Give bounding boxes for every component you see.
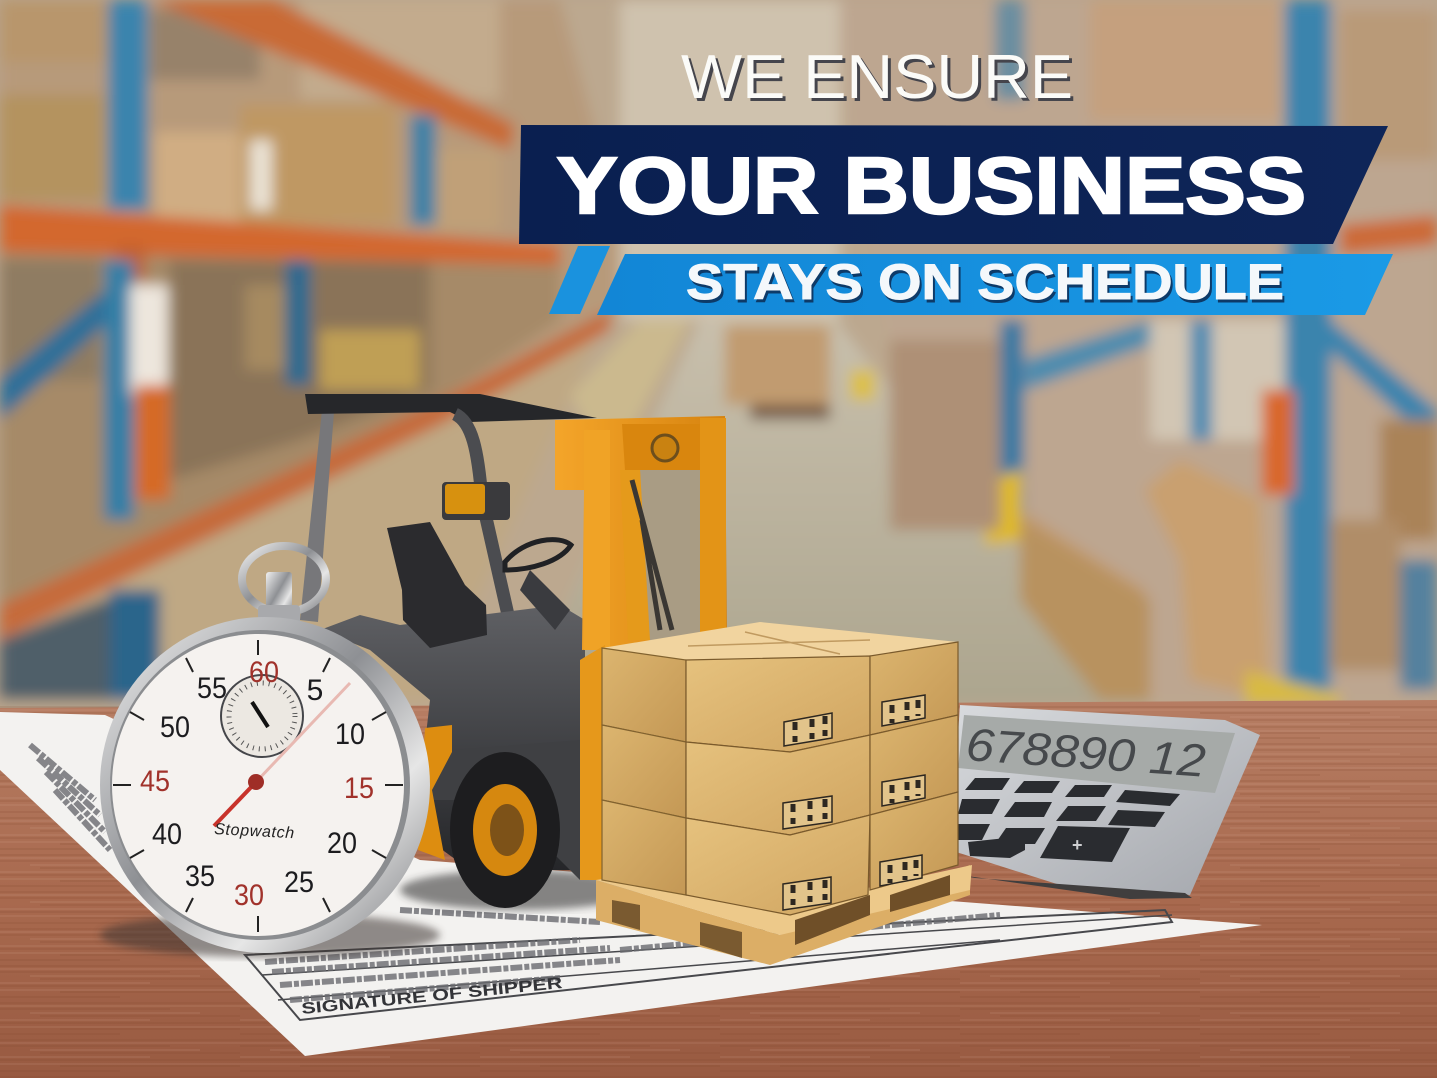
banner: your business: YOUR BUSINESS xyxy=(557,141,1306,230)
forklift seat xyxy=(387,522,487,648)
stopwatch shadow xyxy=(100,913,440,957)
forklift xyxy=(300,394,727,910)
dial numbers: 5 xyxy=(307,674,323,707)
dial numbers: 50 xyxy=(160,711,190,744)
stopwatch brand: Stopwatch xyxy=(214,821,295,842)
dial numbers: 10 xyxy=(335,718,365,751)
dial numbers: 25 xyxy=(284,866,314,899)
document caption: SIGNATURE OF SHIPPER xyxy=(301,975,564,1018)
sub dial xyxy=(221,675,303,757)
pallet boxes xyxy=(596,622,972,965)
dial numbers: 35 xyxy=(185,860,215,893)
left shelf boxes xyxy=(0,0,108,62)
forklift overhead guard xyxy=(300,394,597,690)
left orange beams xyxy=(0,205,560,265)
dial ticks xyxy=(113,640,403,932)
far aisle box xyxy=(725,325,830,405)
dial numbers: 45 xyxy=(140,765,170,798)
headline: WE ENSURE xyxy=(681,43,1073,112)
left box column xyxy=(602,648,686,895)
stopwatch xyxy=(100,546,440,957)
dial numbers: 60 xyxy=(249,656,279,689)
dial numbers xyxy=(140,656,374,912)
shipping document xyxy=(0,712,1262,1056)
headline xyxy=(519,43,1393,315)
wooden pallet xyxy=(596,865,972,965)
right box column xyxy=(870,642,958,890)
banner: stays on schedule: STAYS ON SCHEDULE xyxy=(686,254,1284,310)
dial numbers: 55 xyxy=(197,672,227,705)
aisle floor xyxy=(520,320,1150,705)
forklift wheel xyxy=(450,752,560,908)
dial numbers: 30 xyxy=(234,879,264,912)
wooden table xyxy=(0,700,1437,1078)
left lower dim area xyxy=(0,250,560,605)
dial numbers: 15 xyxy=(344,772,374,805)
right shelving xyxy=(1150,320,1285,440)
forklift body xyxy=(320,605,585,870)
banner: stays on schedule xyxy=(549,246,1393,315)
right boxes xyxy=(1145,460,1270,700)
calculator: 678890 12 xyxy=(964,718,1207,787)
forklift mast xyxy=(555,416,727,880)
box handling labels xyxy=(783,695,925,910)
stopwatch hands xyxy=(214,782,256,826)
banner: your business xyxy=(519,125,1388,244)
heading: we ensure: WE ENSURE xyxy=(684,46,1076,115)
stopwatch case xyxy=(100,617,430,953)
dial numbers: 20 xyxy=(327,827,357,860)
stopwatch crown xyxy=(242,546,326,625)
banner: stays on schedule: STAYS ON SCHEDULE xyxy=(688,257,1286,313)
front box column xyxy=(686,656,870,915)
left blue uprights xyxy=(108,0,148,210)
dial numbers: 40 xyxy=(152,818,182,851)
calculator xyxy=(950,705,1260,899)
calculator: + xyxy=(1072,835,1083,855)
box top xyxy=(602,622,958,660)
forklift shadow xyxy=(400,870,640,910)
